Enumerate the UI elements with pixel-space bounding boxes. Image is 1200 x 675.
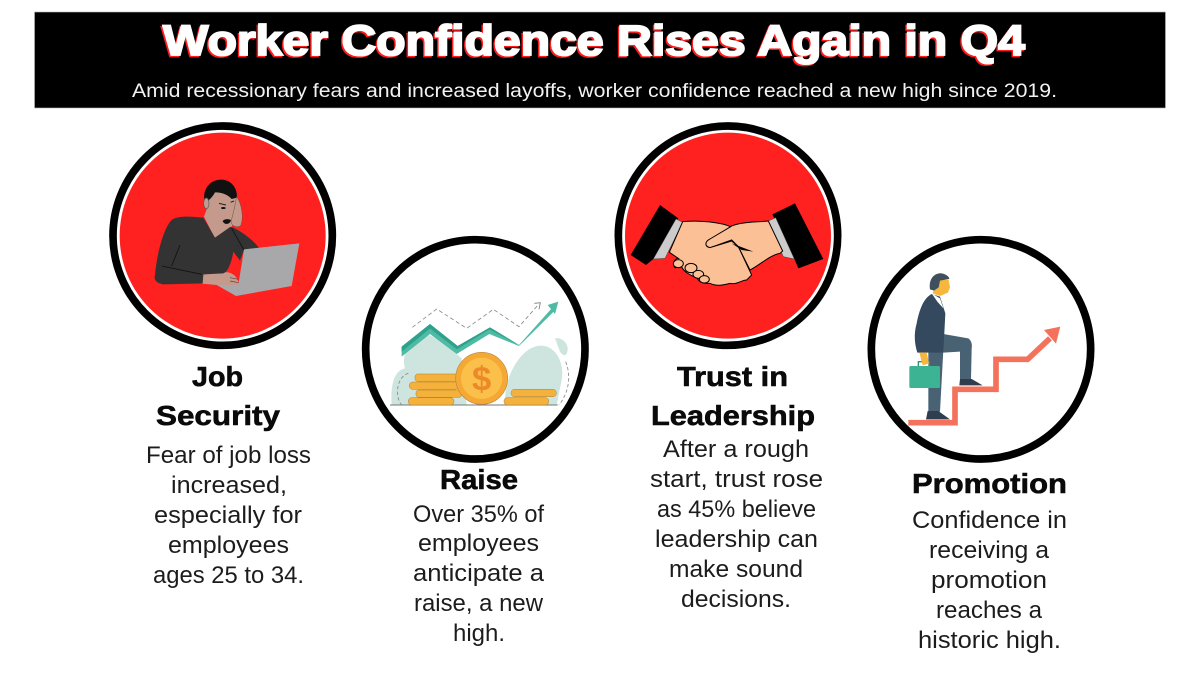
text: raise: high. [453,620,505,647]
heading: trust in leadership [651,361,815,431]
heading: job security [156,361,280,431]
icon: coins and rising chart [366,240,585,459]
icon: handshake [618,126,838,345]
panel: raise [366,240,585,647]
title: Worker Confidence Rises Again in Q4 [163,17,1025,65]
text: promotion: receiving a [929,537,1050,564]
heading: trust in leadership: Trust in [677,361,788,392]
text: job security: ages 25 to 34. [153,562,304,589]
icon: coins and rising chart: $ [472,361,491,399]
text: trust in leadership: start, trust rose [650,466,823,493]
text: trust in leadership: After a rough [663,436,809,463]
icon: worried man at laptop [113,126,332,345]
text: job security [146,442,311,589]
text: trust in leadership: as 45% believe [657,496,816,523]
text: trust in leadership [650,436,823,613]
text: raise: anticipate a [413,560,545,587]
panel: promotion [871,240,1091,654]
text: promotion: Confidence in [912,507,1067,534]
text: promotion: promotion [931,567,1047,594]
icon: businessman climbing stairs [871,240,1091,459]
panel: trust in leadership [618,126,838,613]
text: raise: raise, a new [414,590,544,617]
text: promotion: reaches a [936,597,1043,624]
text: job security: Fear of job loss [146,442,311,469]
heading: job security: Security [156,400,280,431]
subtitle: Amid recessionary fears and increased layoffs, worker confidence reached a new high since 2019. [132,81,1057,102]
text: raise: employees [418,530,539,557]
panel: job security [113,126,332,589]
heading: promotion: Promotion [912,468,1067,499]
header banner [34,12,1166,108]
text: job security: employees [168,532,289,559]
text: trust in leadership: decisions. [681,586,791,613]
text: promotion: historic high. [918,627,1061,654]
text: raise: Over 35% of [413,501,544,528]
heading: job security: Job [192,361,243,392]
text: promotion [912,507,1067,654]
text: job security: increased, [171,472,287,499]
heading: trust in leadership: Leadership [651,400,815,431]
text: trust in leadership: make sound [669,556,803,583]
text: raise [413,501,545,647]
text: trust in leadership: leadership can [655,526,818,553]
heading: raise: Raise [440,464,518,495]
text: job security: especially for [154,502,302,529]
